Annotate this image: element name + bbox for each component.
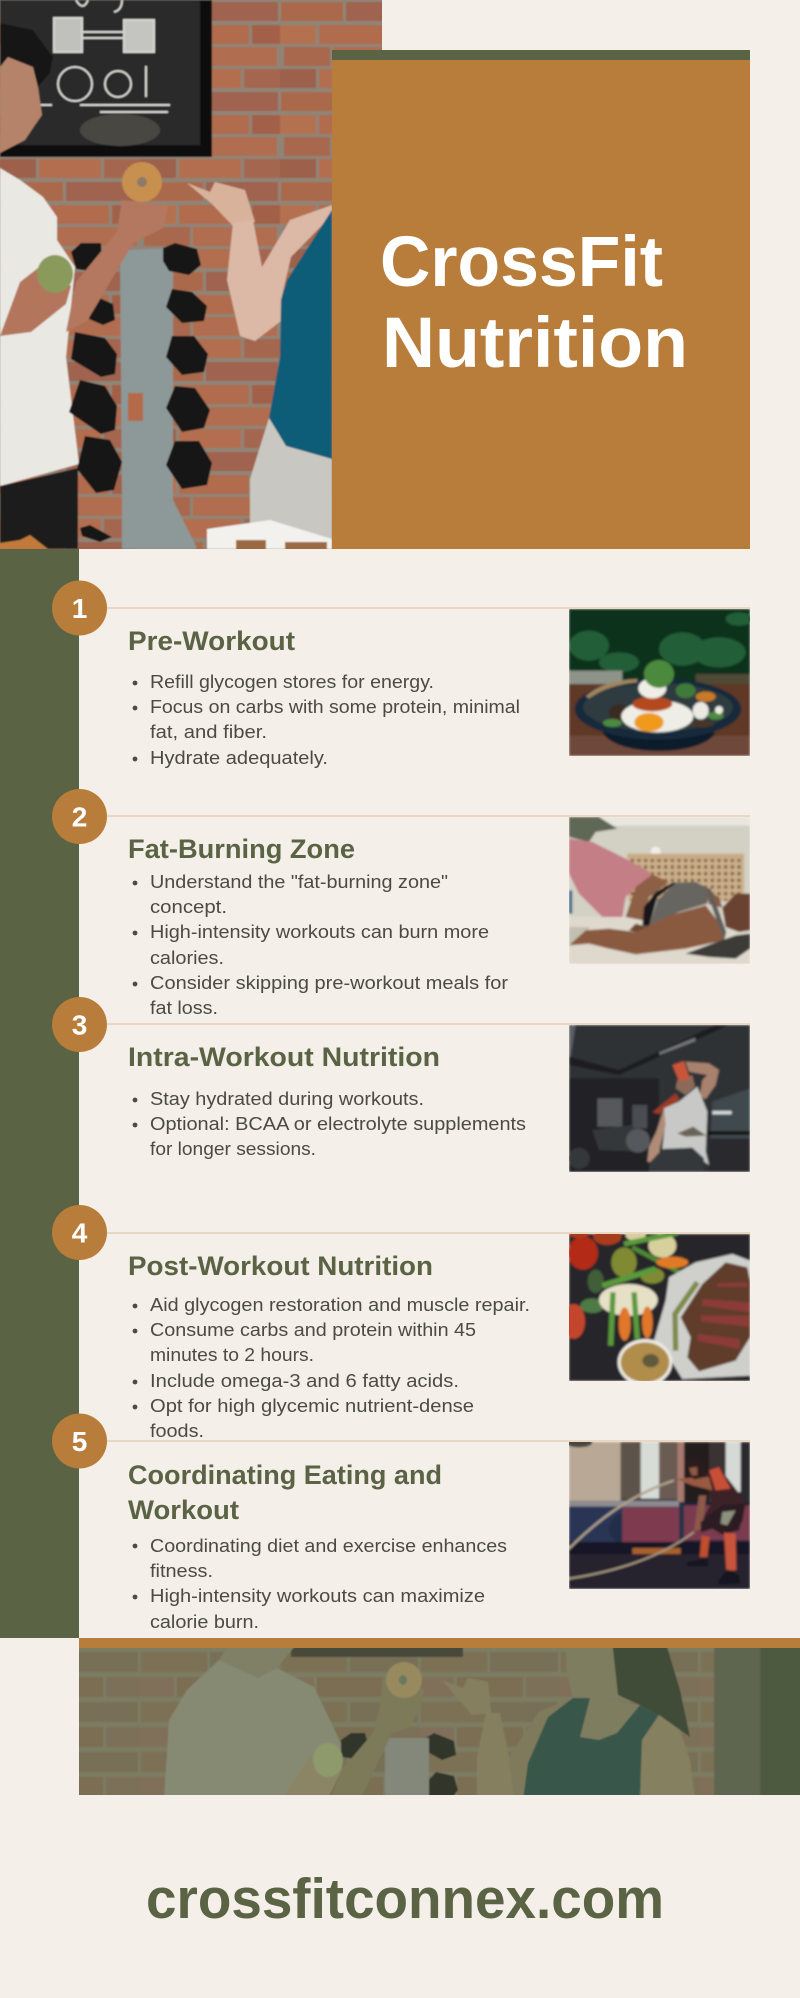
photo: egg and salad bowl — [569, 609, 752, 756]
bullet list: Optional: BCAA or electrolyte supplements — [150, 1114, 526, 1134]
bullet list: fat loss. — [150, 998, 218, 1018]
section 4: Post-Workout Nutrition — [52, 1205, 750, 1441]
bullet list: Consume carbs and protein within 45 — [150, 1320, 476, 1340]
heading: Post-Workout Nutrition — [128, 1251, 433, 1281]
bullet list: calorie burn. — [150, 1612, 259, 1632]
section 2: Fat-Burning Zone — [52, 789, 750, 1018]
number badge 4 — [52, 1205, 107, 1260]
bullet list: Understand the "fat-burning zone" — [150, 872, 448, 892]
heading: Pre-Workout — [128, 626, 295, 656]
section 5: Coordinating Eating and Workout — [52, 1414, 750, 1632]
title panel — [332, 50, 750, 549]
bullet list: Refill glycogen stores for energy. — [150, 672, 434, 692]
bullet list — [133, 1089, 526, 1159]
bullet list: for longer sessions. — [150, 1139, 316, 1159]
number badge 4: 4 — [72, 1218, 88, 1248]
hero photo: two people with a donut and an apple in a gym — [0, 0, 395, 555]
bullet list — [133, 1536, 507, 1632]
bullet list: High-intensity workouts can maximize — [150, 1586, 485, 1606]
number badge 5: 5 — [72, 1426, 87, 1457]
bullet list — [133, 672, 520, 768]
bullet list: Consider skipping pre-workout meals for — [150, 973, 508, 993]
section 3: Intra-Workout Nutrition — [52, 997, 750, 1172]
bottom banner photo, green tinted — [79, 1648, 800, 1795]
bullet list: Focus on carbs with some protein, minimal — [150, 697, 520, 717]
photo: athlete drinking in a gym — [568, 1025, 750, 1172]
number badge 3: 3 — [72, 1010, 87, 1040]
number badge 3 — [52, 997, 107, 1052]
photo: athlete with battle ropes — [566, 1438, 750, 1589]
bullet list: Hydrate adequately. — [150, 748, 328, 768]
heading: Fat-Burning Zone — [128, 834, 355, 864]
photo: steak and vegetables — [563, 1228, 750, 1386]
section 5: Coordinating Eating and Workout: Workout — [128, 1495, 239, 1525]
number badge 5 — [52, 1414, 107, 1468]
bullet list — [133, 1295, 530, 1441]
number badge 2: 2 — [72, 802, 87, 832]
number badge 2 — [52, 789, 107, 844]
orange divider bar — [79, 1638, 800, 1648]
bullet list: fitness. — [150, 1561, 213, 1581]
bullet list: calories. — [150, 948, 224, 968]
bullet list: minutes to 2 hours. — [150, 1345, 314, 1365]
bullet list: Opt for high glycemic nutrient-dense — [150, 1396, 474, 1416]
photo: woman in a yoga bridge pose — [569, 817, 750, 964]
bullet list — [133, 872, 508, 1018]
bullet list: concept. — [150, 897, 227, 917]
bullet list: foods. — [150, 1421, 204, 1441]
bullet list: Aid glycogen restoration and muscle repair. — [150, 1295, 530, 1315]
website url: crossfitconnex.com — [146, 1867, 664, 1931]
section 1: Pre-Workout — [52, 580, 752, 768]
title: CrossFit — [380, 223, 663, 302]
bullet list: Include omega-3 and 6 fatty acids. — [150, 1371, 459, 1391]
green side bar — [0, 549, 79, 1638]
bullet list: High-intensity workouts can burn more — [150, 922, 489, 942]
bullet list: Coordinating diet and exercise enhances — [150, 1536, 507, 1556]
title: Nutrition — [382, 304, 688, 383]
bullet list: Stay hydrated during workouts. — [150, 1089, 424, 1109]
number badge 1 — [52, 580, 107, 636]
bullet list: fat, and fiber. — [150, 722, 267, 742]
heading: Coordinating Eating and — [128, 1460, 442, 1490]
heading: Intra-Workout Nutrition — [128, 1042, 440, 1072]
number badge 1: 1 — [72, 593, 87, 624]
